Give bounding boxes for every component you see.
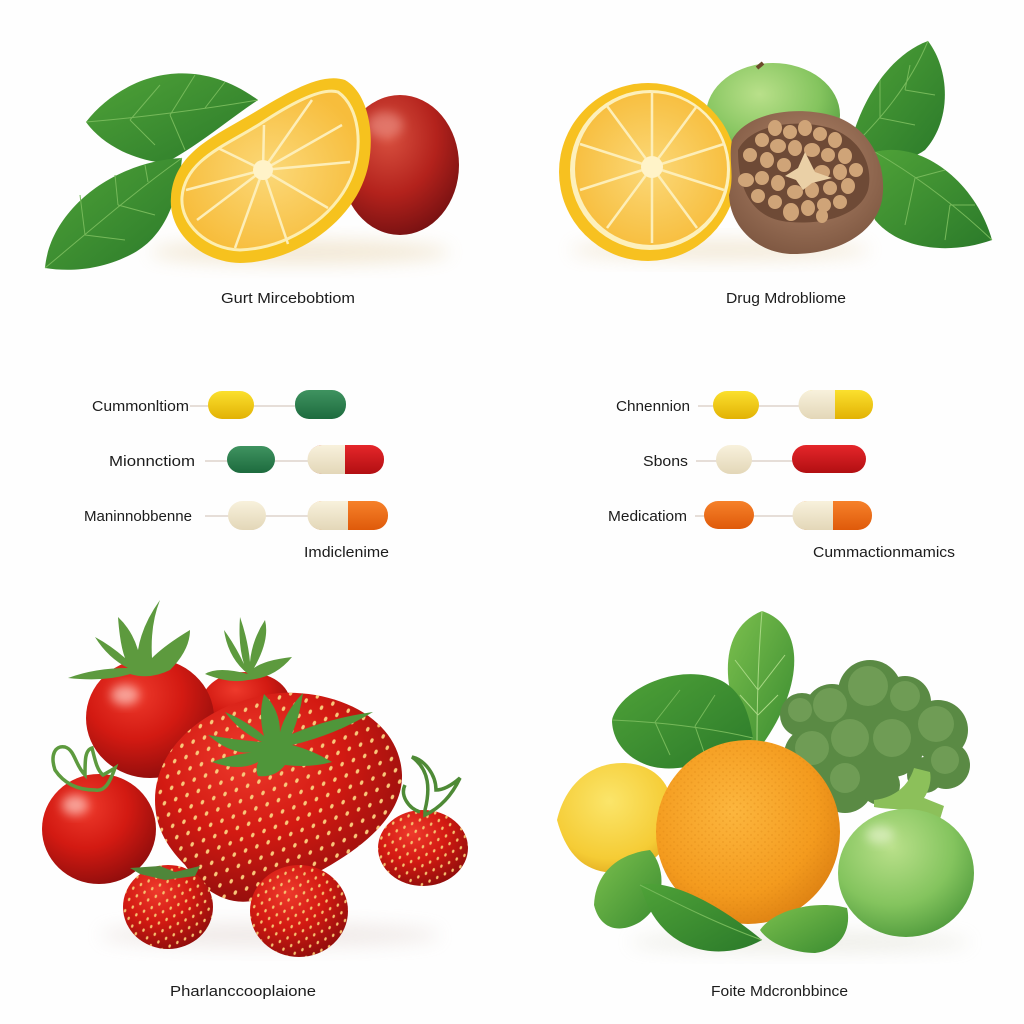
label: row 3: Maninnobbenne [84, 509, 192, 525]
icon: top leaf [728, 611, 794, 745]
capsule: cream and orange [792, 501, 872, 530]
caption: left pills: Imdiclenime [304, 545, 389, 561]
icon: left leaf [612, 674, 753, 768]
icon: right strawberry [378, 757, 468, 886]
panel: vegetables and citrus illustration [557, 611, 974, 953]
label: row 2: Sbons [643, 454, 688, 470]
icon: green apple [706, 63, 840, 167]
label: row 3: Medicatiom [608, 509, 687, 525]
pill: green [295, 390, 346, 419]
pill: green [227, 446, 275, 473]
caption: bottom right: Foite Mdcronbbince [711, 984, 848, 1000]
icon: lemon half [171, 78, 371, 263]
label: row 2: Mionnctiom [109, 454, 195, 470]
icon: top tomato [68, 600, 214, 778]
icon: bottom left leaf [594, 850, 661, 929]
icon: red apple [341, 95, 459, 235]
icon: bottom right leaf [760, 905, 848, 953]
icon: orange [656, 740, 840, 924]
capsule: cream and orange [308, 501, 388, 530]
icon: lower leaf [45, 158, 182, 270]
capsule: cream and yellow [798, 390, 873, 419]
icon: broccoli [780, 660, 970, 826]
caption: bottom left: Pharlanccooplaione [170, 984, 316, 1000]
icon: left tomato [42, 747, 156, 884]
icon: nut shell with seeds [729, 111, 883, 254]
caption: top left: Gurt Mircebobtiom [221, 291, 355, 307]
icon: small strawberry right [250, 865, 348, 957]
icon: front leaf [870, 150, 992, 248]
icon: small strawberry left [123, 865, 213, 949]
pill: yellow [208, 391, 254, 419]
caption: top right: Drug Mdrobliome [726, 291, 846, 307]
caption: right pills: Cummactionmamics [813, 545, 955, 561]
panel: right pill chart [608, 390, 955, 561]
panel: left pill chart [84, 390, 389, 561]
panel: tomatoes and strawberries illustration [42, 600, 468, 957]
pill: cream [228, 501, 266, 530]
icon: bottom centre leaf [640, 884, 762, 951]
label: row 1: Chnennion [616, 399, 690, 415]
pill: cream [716, 445, 752, 474]
capsule: cream and red [308, 445, 384, 474]
pill: orange [704, 501, 754, 529]
icon: upper leaf [86, 73, 258, 163]
icon: orange half [559, 83, 737, 261]
icon: lemon [557, 763, 673, 872]
label: row 1: Cummonltiom [92, 399, 189, 415]
icon: back leaf [849, 41, 945, 161]
panel: orange, nut shell and leaves illustration [559, 41, 992, 261]
pill: yellow [713, 391, 759, 419]
icon: green apple [838, 809, 974, 937]
pill: red [792, 445, 866, 473]
panel: citrus, apple and leaves illustration [45, 73, 459, 270]
icon: large strawberry [155, 693, 402, 902]
icon: back tomato [202, 617, 292, 732]
